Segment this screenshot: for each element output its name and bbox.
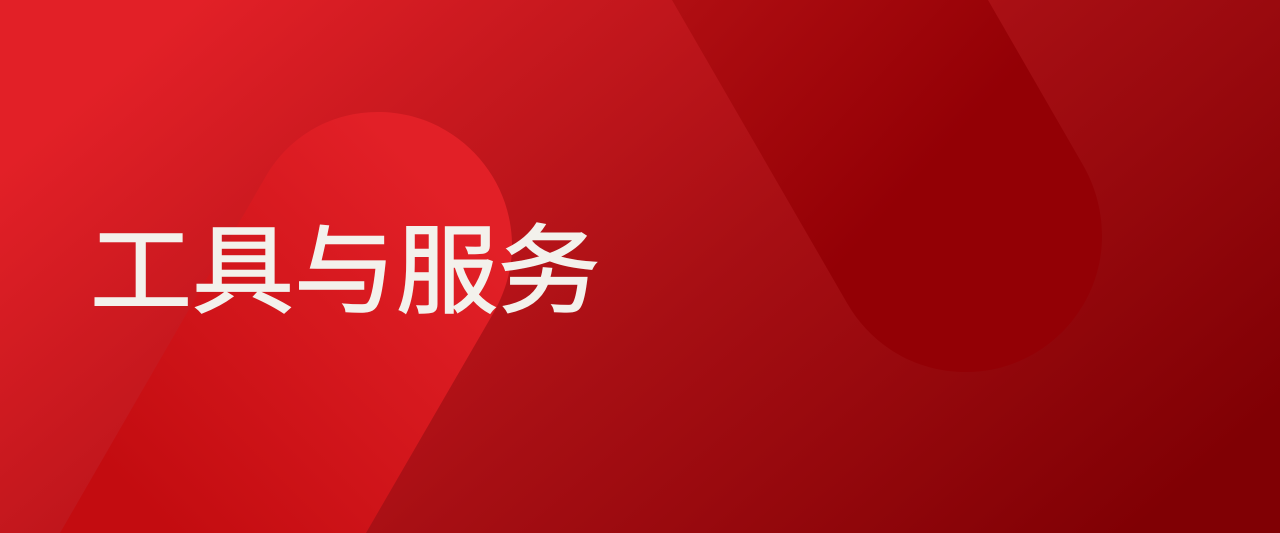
- shape: left rounded bar: [60, 112, 512, 533]
- shape: right rounded bar: [672, 0, 1102, 372]
- title: 工具与服务: [90, 193, 600, 333]
